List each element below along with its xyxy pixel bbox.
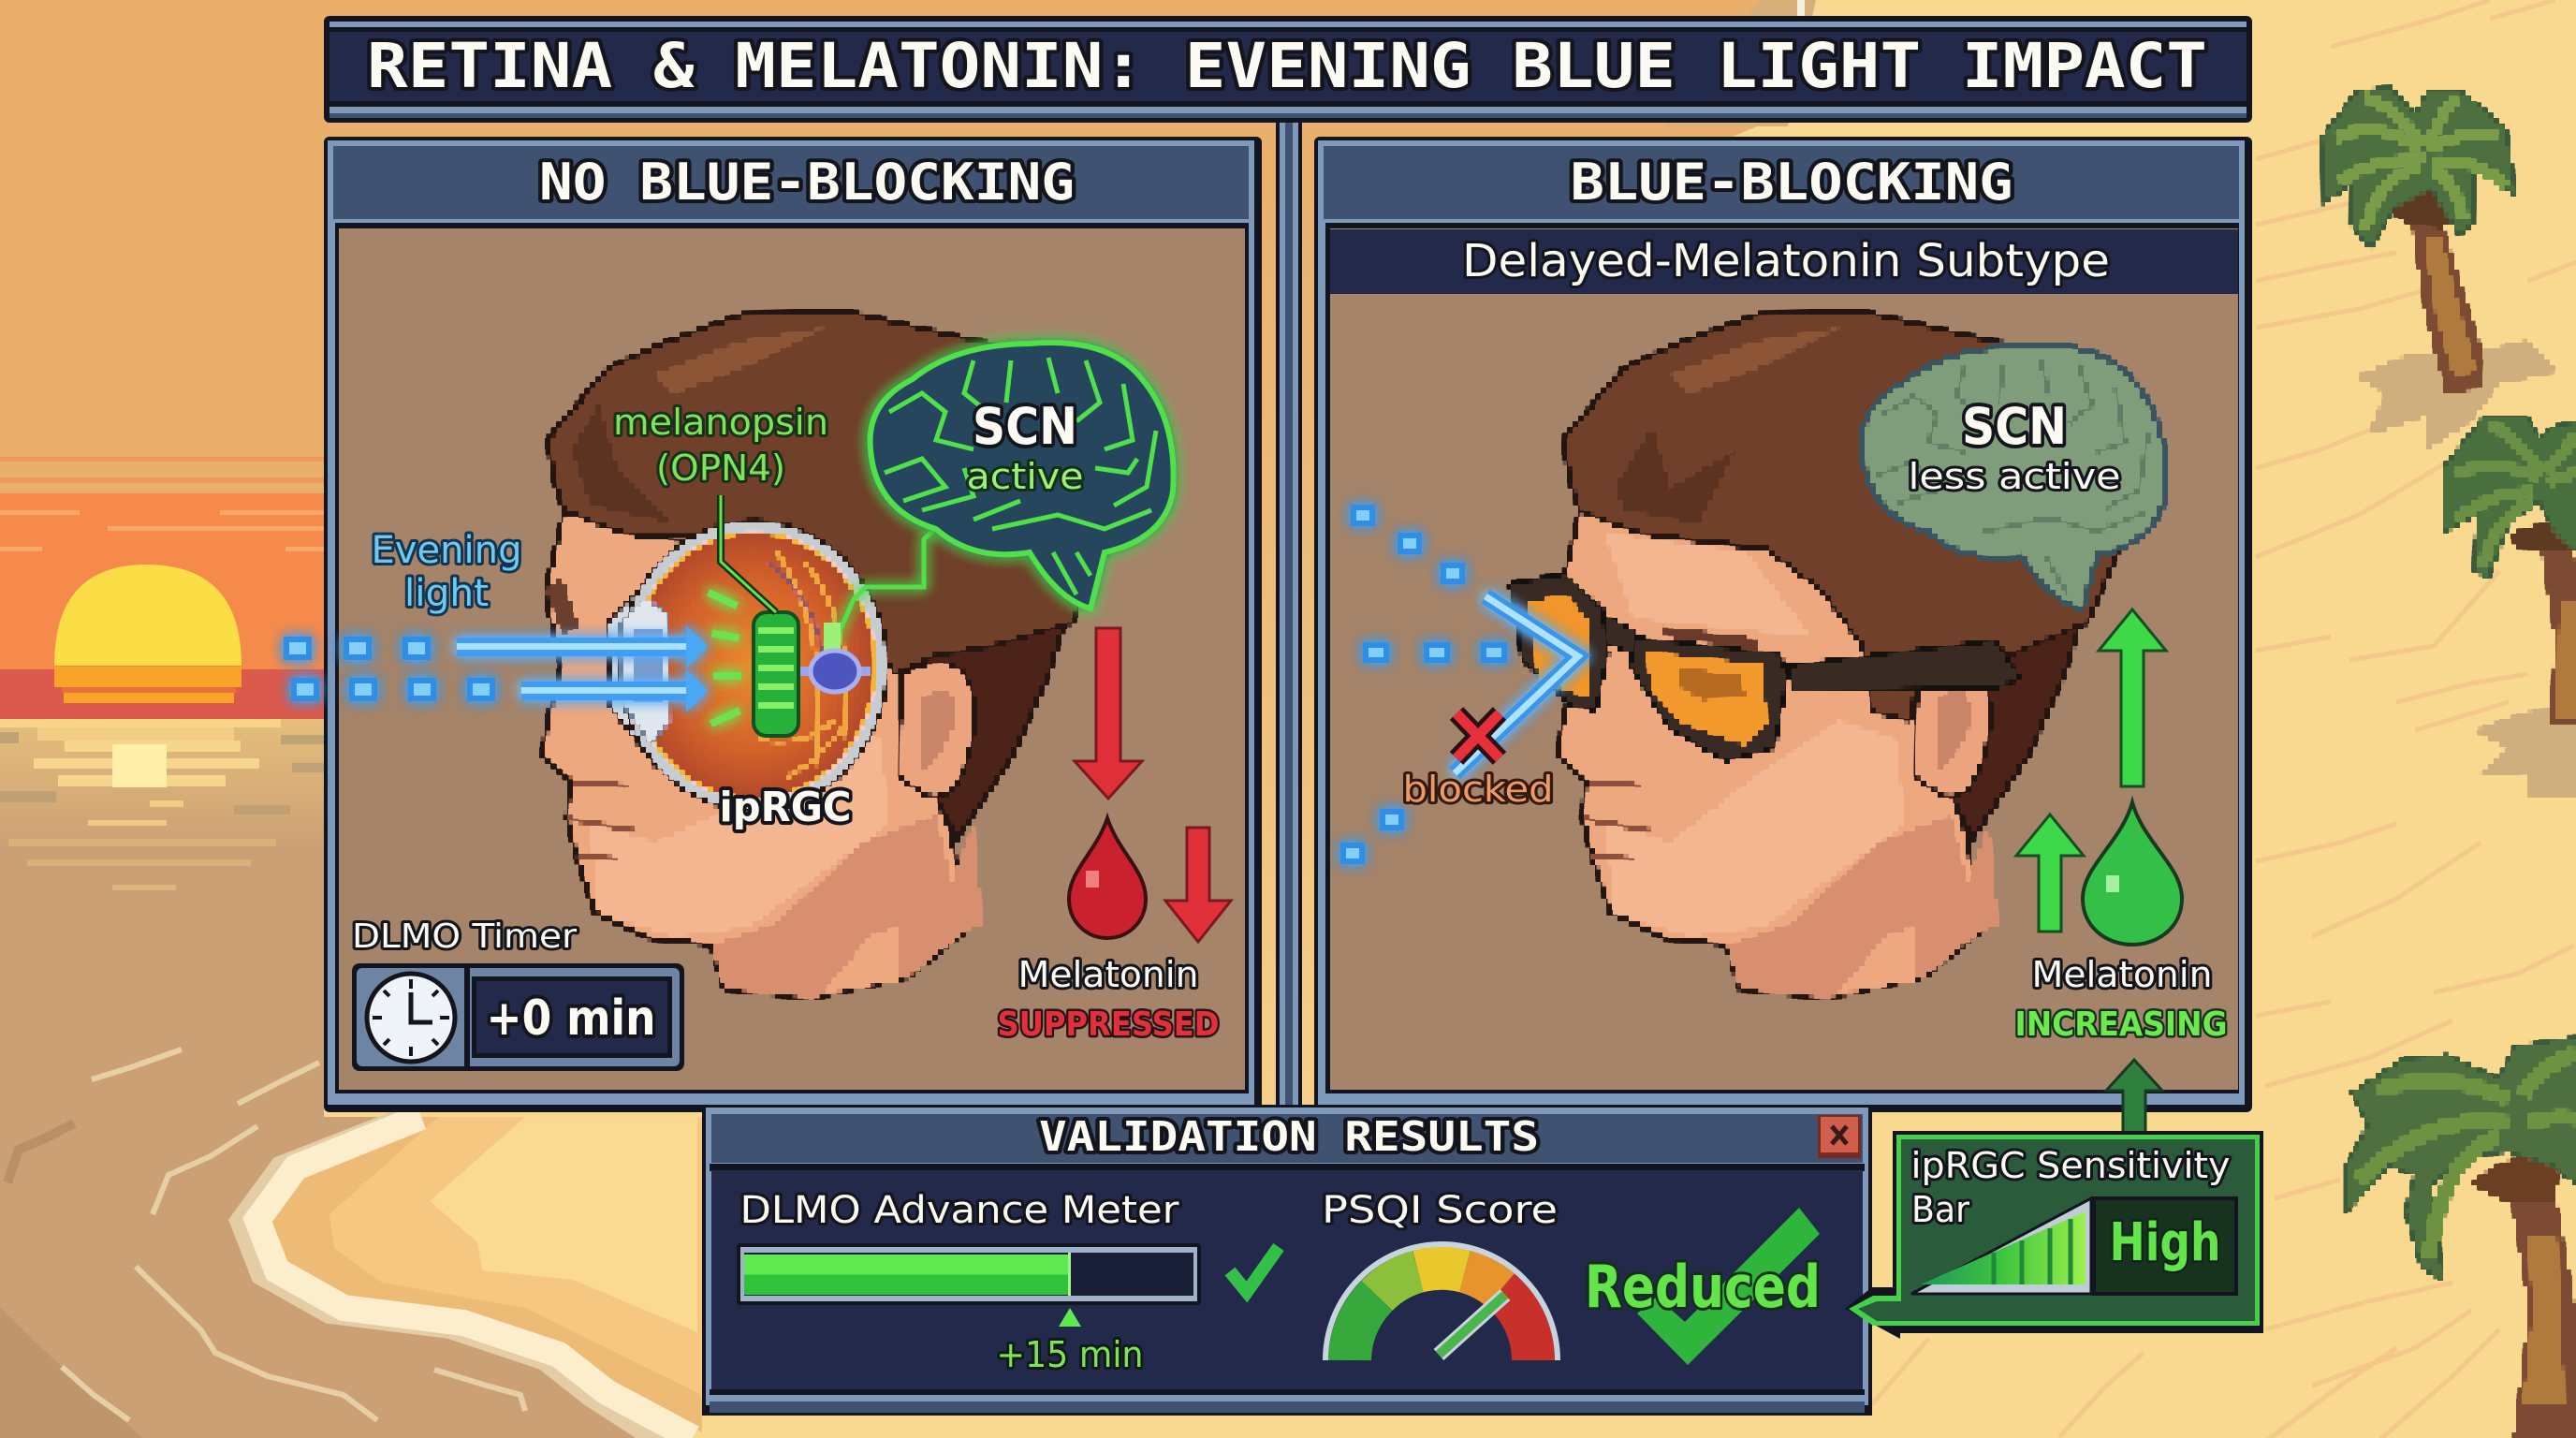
label: DLMO advance meter: DLMO Advance Meter: [739, 1189, 1179, 1232]
palm tree 2: [2443, 418, 2576, 799]
icon: orange glasses: [1510, 574, 2021, 761]
title text: RETINA & MELATONIN: EVENING BLUE LIGHT IMPACT: [367, 30, 2207, 102]
label: ipRGC sensitivity bar: ipRGC Sensitivity: [1911, 1145, 2230, 1186]
subheading: delayed-melatonin subtype: Delayed-Melatonin Subtype: [1462, 235, 2110, 287]
label: ipRGC sensitivity bar: Bar: [1911, 1189, 1969, 1230]
heading: blue-blocking: BLUE-BLOCKING: [1571, 153, 2012, 212]
label: evening light: light: [404, 572, 489, 615]
panel: validation results: [702, 1105, 1872, 1416]
arrow: deflected blue light chevron: [1455, 596, 1578, 773]
chart: sensitivity wedge: [1911, 1198, 2236, 1294]
label: evening light: [371, 529, 522, 615]
label: melatonin: Melatonin: [2031, 954, 2213, 995]
icon: melanopsin signal rays: [707, 589, 741, 727]
value: high: High: [2110, 1212, 2220, 1273]
label: less active: less active: [1908, 456, 2121, 497]
arrow: upper blue light beam: [457, 625, 708, 668]
icon: green melatonin drop: [2083, 802, 2182, 945]
head profile: with glasses: [1510, 312, 2153, 998]
arrow: lower blue light beam: [521, 669, 708, 712]
icon: ipRGC cell: [754, 612, 841, 736]
icon: red X: [1456, 713, 1500, 758]
sunset sky: [0, 457, 324, 719]
title bar: [324, 16, 2252, 123]
panel: no blue-blocking: [286, 137, 1262, 1112]
chart: DLMO advance meter: [737, 1243, 1201, 1327]
label: ipRGC: ipRGC: [719, 784, 852, 831]
connector arrow up to panel: [2106, 1060, 2162, 1138]
icon: meter check: [1230, 1247, 1279, 1292]
panel: blue-blocking: [1314, 137, 2252, 1112]
label: melanopsin: melanopsin: [613, 402, 828, 443]
label: melatonin: Melatonin: [1018, 954, 1198, 995]
arrow: melatonin up to SCN: [2099, 609, 2166, 786]
heading: validation results: VALIDATION RESULTS: [1039, 1113, 1539, 1161]
icon: red melatonin drop: [1069, 818, 1146, 938]
icon: large reduced check: [1637, 1208, 1820, 1365]
value: +15 min: +15 min: [996, 1334, 1144, 1375]
icon: less-active brain: [1863, 345, 2166, 609]
label: DLMO timer: DLMO Timer: [352, 917, 577, 956]
label: SCN: SCN: [973, 397, 1077, 456]
label: suppressed: SUPPRESSED: [998, 1005, 1219, 1044]
arrow: SCN down to melatonin: [1075, 628, 1142, 799]
label: active: active: [966, 456, 1084, 497]
palm tree 3: [2347, 1037, 2576, 1438]
callout line: melanopsin: [721, 495, 776, 612]
callout line highlight: [721, 495, 776, 612]
heading: no blue-blocking: NO BLUE-BLOCKING: [539, 153, 1075, 212]
palm tree 1: [2321, 87, 2558, 451]
eye cross-section: [607, 521, 887, 811]
arrow: melatonin falling: [1165, 828, 1231, 942]
arrow: melatonin rising: [2016, 814, 2084, 932]
sun: [54, 565, 242, 703]
label: PSQI score: PSQI Score: [1322, 1189, 1558, 1232]
water reflection: [0, 719, 324, 906]
icon: clock: [367, 974, 455, 1062]
label: blocked: blocked: [1402, 769, 1554, 810]
label: evening light: Evening: [371, 529, 522, 572]
icon: blue light dots: [1343, 507, 1504, 861]
readout: +0 min: +0 min: [487, 990, 655, 1047]
marker: meter position: [1059, 1308, 1081, 1327]
icon: ganglion node: [800, 651, 871, 692]
DLMO timer readout: [352, 963, 684, 1071]
callout: ipRGC sensitivity bar: [1845, 1131, 2263, 1339]
label: OPN4: (OPN4): [656, 448, 785, 489]
label: reduced: Reduced: [1585, 1253, 1821, 1321]
center divider column: [1276, 117, 1302, 1109]
icon: blue light dots: [286, 639, 492, 698]
icon: active brain: [871, 343, 1174, 609]
label: increasing: INCREASING: [2014, 1005, 2228, 1044]
label: SCN: SCN: [1962, 397, 2067, 456]
head profile: no glasses: [543, 312, 1137, 998]
icon: close button: [1818, 1115, 1861, 1158]
optic nerve trace: [833, 507, 958, 646]
label: ipRGC sensitivity bar: [1911, 1145, 2230, 1230]
gauge needle: [1439, 1295, 1505, 1355]
chart: PSQI gauge: [1325, 1244, 1558, 1360]
